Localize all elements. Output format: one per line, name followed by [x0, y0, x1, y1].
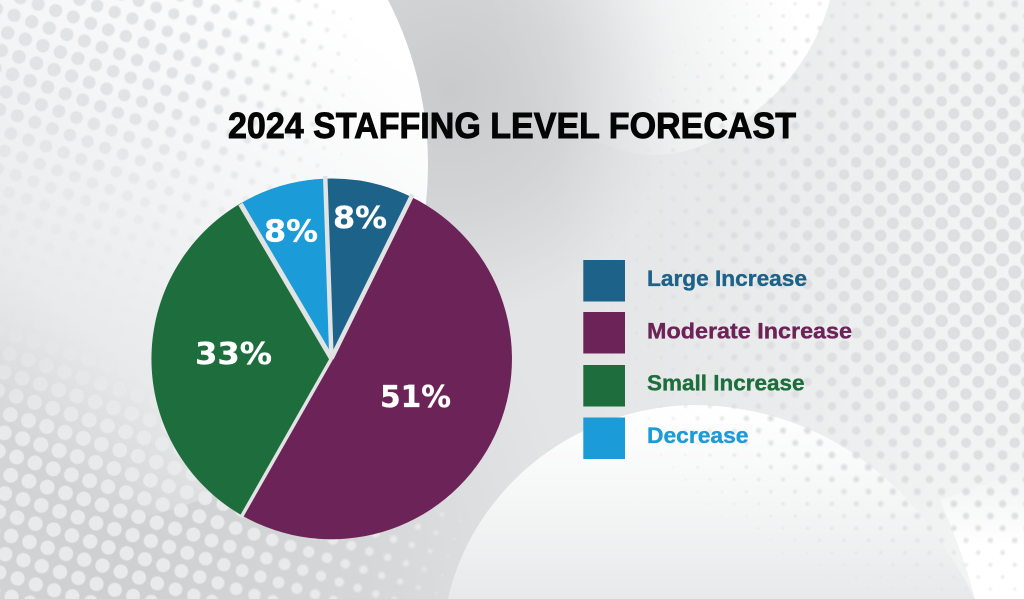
slice: decrease 8%: [241, 179, 332, 358]
legend swatch: decrease: [583, 418, 625, 459]
value: large increase: 8%: [333, 201, 387, 236]
title: 2024 STAFFING LEVEL FORECAST: [228, 105, 796, 146]
legend label: small increase: Small Increase: [647, 370, 804, 396]
legend swatch: moderate increase: [583, 312, 625, 354]
slice: large increase 8%: [326, 178, 411, 358]
legend label: moderate increase: Moderate Increase: [647, 318, 852, 344]
slice: small increase 33%: [151, 203, 332, 516]
legend swatch: small increase: [583, 365, 625, 406]
value: decrease: 8%: [264, 214, 318, 250]
legend: [583, 260, 852, 459]
value: small increase: 33%: [195, 337, 272, 372]
legend label: large increase: Large Increase: [647, 266, 807, 291]
legend swatch: large increase: [583, 260, 625, 302]
slice: moderate increase 51%: [242, 197, 512, 539]
pie chart: [151, 176, 512, 539]
value: moderate increase: 51%: [380, 380, 451, 415]
legend label: decrease: Decrease: [647, 423, 748, 448]
